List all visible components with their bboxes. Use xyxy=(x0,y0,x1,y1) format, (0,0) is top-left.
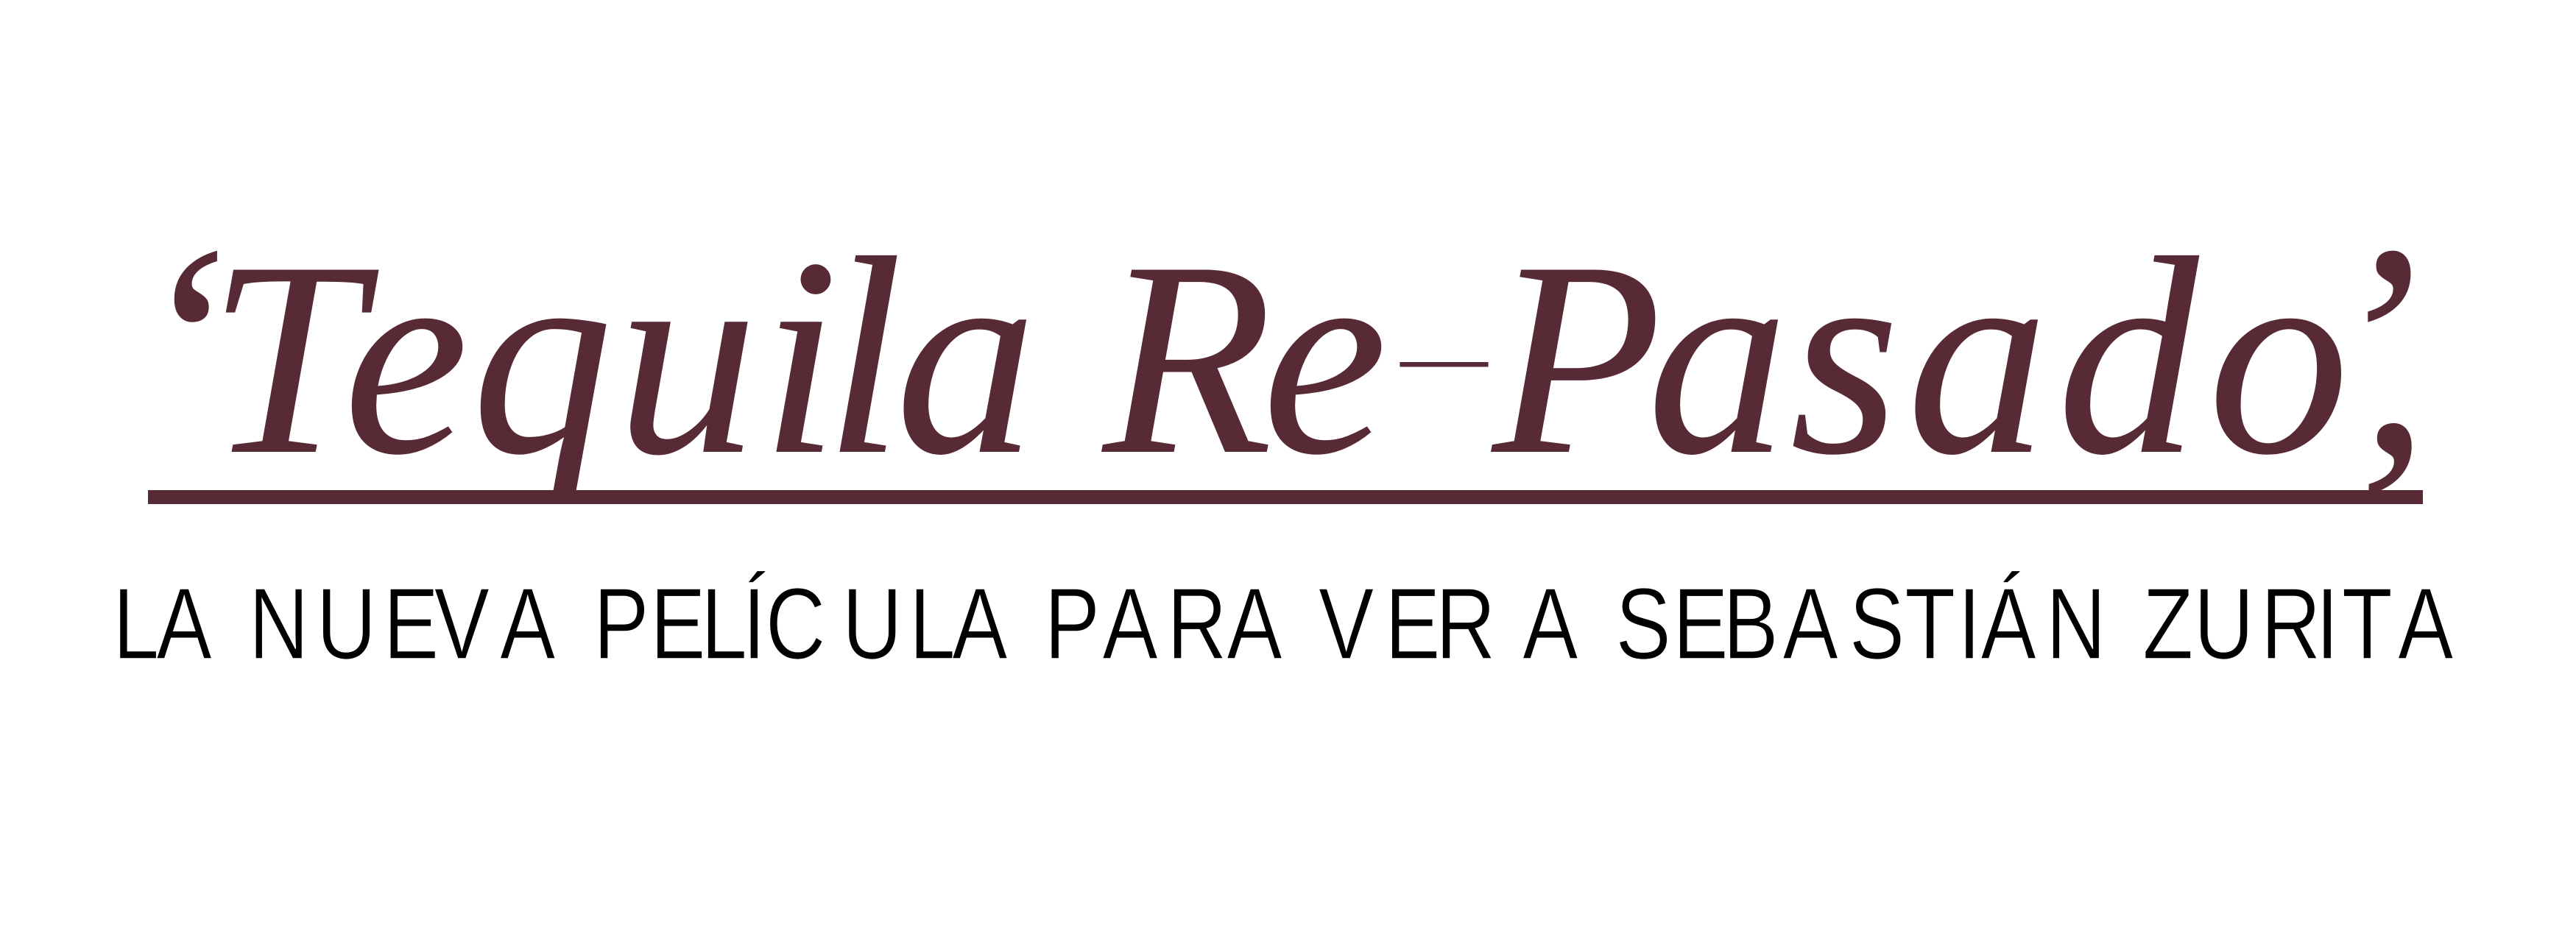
title: ‘ xyxy=(133,188,226,496)
subtitle: PELÍCULA xyxy=(593,567,1008,681)
subtitle: SEBASTIÁN xyxy=(1615,567,2106,681)
subtitle: VER xyxy=(1319,567,1496,681)
subtitle: PARA xyxy=(1045,567,1282,681)
title: – xyxy=(1400,301,1489,408)
title: T xyxy=(208,204,381,512)
subtitle xyxy=(113,567,2454,681)
title: R xyxy=(1098,204,1273,512)
subtitle: A xyxy=(1522,567,1578,681)
subtitle: LA xyxy=(113,567,212,681)
subtitle: NUEVA xyxy=(249,567,555,681)
subtitle: ZURITA xyxy=(2142,567,2454,681)
white mask below the rule xyxy=(0,504,2576,548)
title xyxy=(133,188,2429,514)
title: equila xyxy=(343,200,1037,514)
title: ’ xyxy=(2326,188,2419,496)
title: asado xyxy=(1647,200,2350,514)
title rule xyxy=(148,490,2423,504)
title: e xyxy=(1262,200,1388,514)
title: P xyxy=(1488,204,1662,512)
title: , xyxy=(2360,204,2429,512)
